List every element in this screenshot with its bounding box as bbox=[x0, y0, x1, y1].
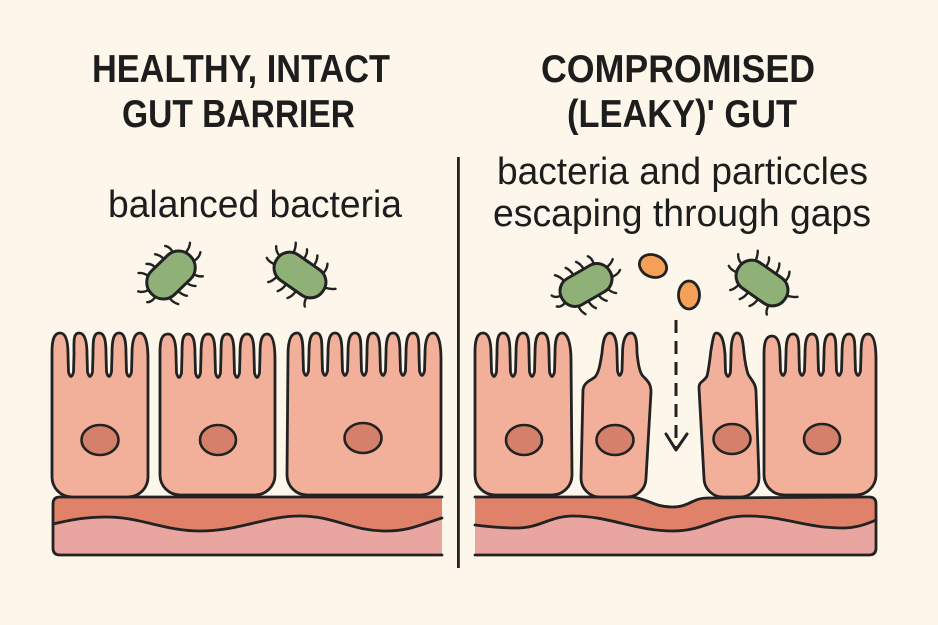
cell 3 bbox=[287, 333, 441, 495]
panel: healthy gut barrier bbox=[52, 48, 442, 555]
nuclei bbox=[82, 423, 382, 455]
title: healthy, intact gut barrier: GUT BARRIER bbox=[122, 93, 355, 136]
epithelial tissue layer: healthy bbox=[52, 333, 442, 555]
basement layer with dip bbox=[475, 497, 876, 555]
icon: green bacterium right bbox=[255, 232, 345, 318]
title: compromised leaky gut: (LEAKY)' GUT bbox=[567, 93, 797, 136]
basement layer bbox=[53, 497, 442, 555]
title: compromised leaky gut bbox=[541, 48, 815, 136]
icon: orange particle top bbox=[636, 251, 670, 281]
cell 1 bbox=[475, 333, 572, 495]
label: balanced bacteria: balanced bacteria bbox=[108, 184, 403, 226]
title: compromised leaky gut: COMPROMISED bbox=[541, 48, 815, 91]
title: healthy, intact gut barrier bbox=[92, 48, 390, 136]
icon: orange particle bottom bbox=[678, 281, 700, 309]
cell 3, narrowed bbox=[699, 333, 759, 497]
nuclei bbox=[506, 424, 840, 455]
epithelial tissue layer: compromised bbox=[475, 333, 876, 555]
arrow: dashed downward through gap bbox=[666, 320, 687, 450]
cell 4 bbox=[764, 334, 876, 495]
title: healthy, intact gut barrier: HEALTHY, INTACT bbox=[92, 48, 390, 91]
cell 2 bbox=[160, 334, 275, 495]
label: bacteria and particles escaping bbox=[493, 151, 871, 235]
cell 1 bbox=[52, 333, 148, 497]
label: bacteria and particles escaping: bacteria and particcles bbox=[497, 151, 868, 193]
label: bacteria and particles escaping: escaping through gaps bbox=[493, 193, 871, 235]
cell 2, narrowed bbox=[581, 333, 651, 497]
divider bbox=[457, 157, 460, 568]
icon: green bacterium left bbox=[127, 231, 216, 319]
icon: green bacterium right bbox=[717, 240, 807, 326]
panel: compromised leaky gut bbox=[475, 48, 876, 555]
icon: green bacterium left bbox=[542, 245, 631, 325]
